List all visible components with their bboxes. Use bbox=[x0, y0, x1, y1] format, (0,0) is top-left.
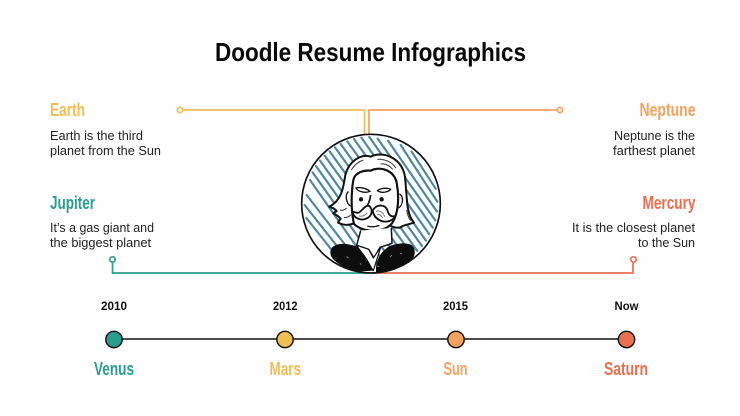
text block: Earth: Earth is the third bbox=[50, 128, 143, 143]
timeline item: Venus: 2010 bbox=[101, 299, 127, 313]
connector: Earth bbox=[177, 107, 364, 135]
text block: Neptune: Neptune is the bbox=[614, 128, 695, 143]
text block: Jupiter: Jupiter bbox=[50, 193, 95, 213]
text block: Earth: planet from the Sun bbox=[50, 143, 161, 158]
timeline item: Venus bbox=[94, 299, 134, 379]
timeline item: Venus: Venus bbox=[94, 359, 134, 379]
timeline item: Sun: 2015 bbox=[443, 299, 468, 313]
timeline item: Sun bbox=[443, 299, 468, 379]
text block: Neptune: Neptune bbox=[640, 100, 696, 120]
blue hatching bbox=[305, 137, 437, 270]
text block: Neptune bbox=[613, 100, 696, 158]
hair bbox=[329, 155, 414, 228]
timeline item: Mars: 2012 bbox=[273, 299, 298, 313]
mouth bbox=[367, 225, 379, 227]
portrait: doodle man in circle bbox=[302, 134, 440, 273]
text block: Jupiter: the biggest planet bbox=[50, 235, 151, 250]
timeline item: Saturn: Now bbox=[614, 299, 639, 313]
connector: Neptune bbox=[369, 107, 563, 135]
timeline line bbox=[114, 338, 626, 340]
timeline item: Mars: Mars bbox=[270, 359, 301, 379]
timeline item: Mars bbox=[270, 299, 301, 379]
timeline item: Saturn: Saturn bbox=[604, 359, 648, 379]
timeline item: Saturn bbox=[604, 299, 648, 379]
text block: Mercury: It is the closest planet bbox=[572, 220, 695, 235]
text block: Mercury bbox=[572, 193, 696, 250]
moustache shading bbox=[359, 211, 385, 218]
text block: Earth bbox=[50, 100, 161, 158]
text block: Earth: Earth bbox=[50, 100, 85, 120]
text block: Neptune: farthest planet bbox=[613, 143, 695, 158]
title: Doodle Resume Infographics bbox=[215, 37, 526, 67]
face bbox=[352, 169, 398, 231]
timeline item: Sun: Sun bbox=[444, 359, 468, 379]
connector: Mercury bbox=[375, 257, 636, 273]
brows and eyes bbox=[356, 188, 391, 201]
text block: Jupiter bbox=[50, 193, 154, 250]
connector: Jupiter bbox=[110, 257, 375, 273]
text block: Jupiter: It’s a gas giant and bbox=[50, 220, 154, 235]
moustache bbox=[353, 206, 395, 222]
ears bbox=[346, 192, 402, 208]
jacket specks bbox=[347, 253, 402, 267]
hair strands bbox=[340, 159, 411, 221]
text block: Mercury: to the Sun bbox=[638, 235, 695, 250]
circle outline bbox=[302, 134, 440, 273]
nose bbox=[365, 195, 371, 208]
shirt bbox=[357, 245, 381, 271]
text block: Mercury: Mercury bbox=[642, 193, 696, 213]
jacket scribble bbox=[330, 243, 415, 273]
neck and collar bbox=[357, 228, 392, 258]
